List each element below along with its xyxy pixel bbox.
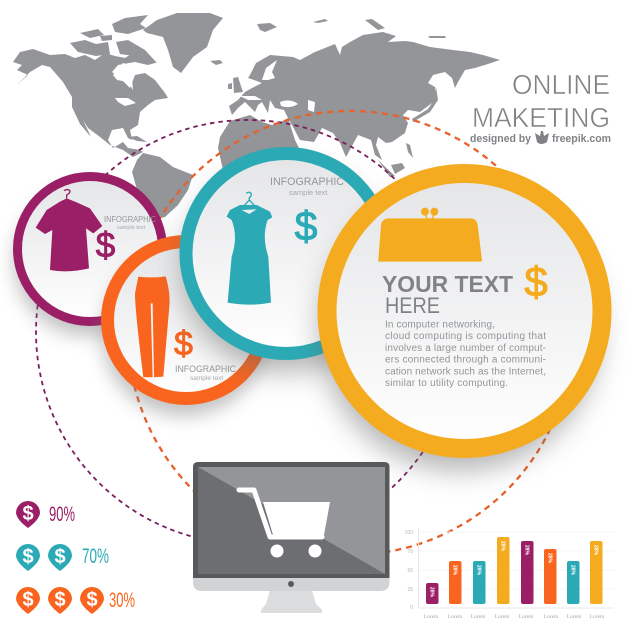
body text: [385, 320, 546, 389]
legend: 70%: $: [54, 546, 66, 568]
legend: 90%: $: [22, 503, 34, 525]
bar chart: 28%: [476, 565, 482, 576]
dashed route: purple: [36, 120, 460, 544]
bar chart: [405, 528, 614, 620]
dollar sign: $: [524, 258, 548, 305]
icon: trousers: [135, 276, 170, 377]
panel: purple shirt circle: [14, 176, 162, 336]
world map: [13, 13, 500, 220]
bar chart: 28%: [592, 545, 598, 556]
caption: INFOGRAPHIC: [175, 364, 236, 375]
bar chart: 28%: [428, 587, 434, 598]
bar chart: 28%: [524, 545, 530, 556]
legend: 90%: [16, 501, 75, 528]
bar chart: Lorem: [590, 614, 605, 620]
title: [472, 69, 610, 133]
dollar sign: $: [96, 226, 115, 265]
bar chart: Lorem: [448, 614, 463, 620]
dollar sign: $: [174, 325, 193, 363]
body text: cation network such as the Internet,: [385, 366, 546, 378]
body text: involves a large number of comput-: [385, 343, 546, 354]
bar chart: 28%: [546, 553, 552, 564]
bar chart: Lorem: [519, 614, 534, 620]
title: MAKETING: [472, 102, 610, 133]
bar chart: 50: [407, 568, 413, 574]
bar chart: Lorem: [544, 614, 559, 620]
bar chart: Lorem: [424, 614, 439, 620]
icon: shopping cart: [239, 490, 330, 558]
sample text: sample text: [117, 225, 146, 231]
legend: 70%: [16, 544, 109, 571]
panel: teal dress circle: [182, 154, 386, 372]
bar chart: 28%: [452, 565, 458, 576]
bar chart: 28%: [500, 541, 506, 552]
icon: monitor with cart: [193, 462, 390, 613]
legend: 30%: $: [54, 589, 66, 611]
bar chart: Lorem: [471, 614, 486, 620]
subheading: HERE: [385, 293, 440, 318]
legend: 90%: 90%: [49, 503, 75, 526]
bar chart: 100: [405, 530, 413, 536]
credit line: freepik.com: [552, 133, 611, 145]
dollar sign: $: [295, 203, 318, 249]
body text: ers connected through a communi-: [385, 354, 546, 366]
bar chart: 75: [407, 549, 413, 555]
sample text: sample text: [289, 188, 328, 197]
credit line: [470, 131, 611, 145]
legend: 30%: $: [86, 589, 98, 611]
icon: shirt: [36, 190, 102, 271]
panel: orange trousers circle: [102, 242, 266, 416]
legend: 70%: $: [22, 546, 34, 568]
bar chart: 0: [410, 605, 413, 611]
legend: 30%: [16, 587, 135, 614]
panel: yellow purse circle: [320, 174, 602, 470]
sample text: sample text: [190, 375, 223, 382]
body text: In computer networking,: [385, 320, 495, 330]
bar chart: 28%: [570, 565, 576, 576]
legend: 70%: 70%: [82, 545, 109, 568]
bar chart: Lorem: [495, 614, 510, 620]
body text: similar to utility computing.: [385, 378, 508, 389]
icon: dress: [227, 192, 272, 305]
bar chart: 25: [407, 587, 413, 593]
legend: 30%: 30%: [109, 589, 135, 612]
heading: YOUR TEXT: [382, 271, 514, 297]
caption: INFOGRAPHIC: [270, 176, 344, 188]
bar chart: Lorem: [567, 614, 582, 620]
legend: 30%: $: [22, 589, 34, 611]
credit line: designed by: [470, 133, 532, 145]
icon: purse: [378, 208, 482, 262]
body text: cloud computing is computing that: [385, 331, 546, 342]
title: ONLINE: [512, 69, 610, 100]
caption: INFOGRAPHIC: [104, 215, 156, 224]
dashed route: orange: [128, 111, 572, 555]
